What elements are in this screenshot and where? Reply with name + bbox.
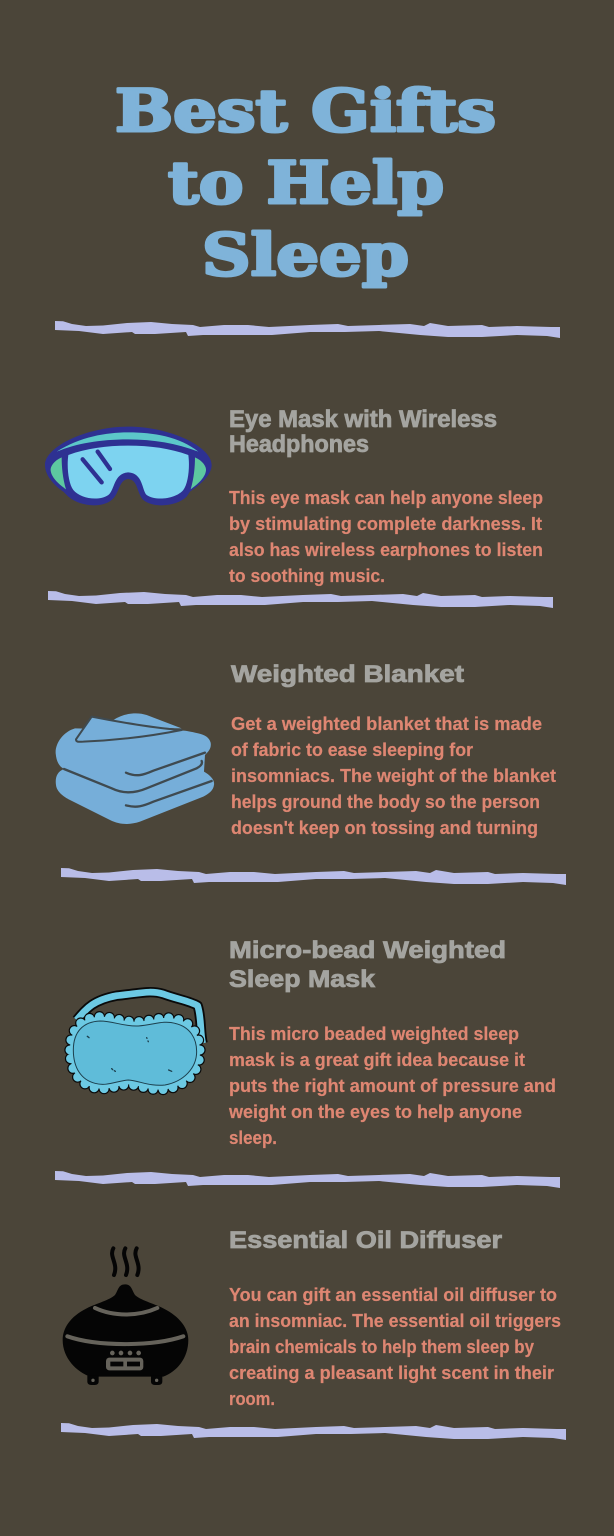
panel: weighted blanket bbox=[56, 661, 556, 838]
icon: folded blanket bbox=[56, 713, 214, 824]
text: micro-bead mask description: mask is a great gift idea because it bbox=[229, 1050, 525, 1070]
text: eye mask description bbox=[229, 488, 543, 586]
heading: micro-bead mask bbox=[229, 937, 506, 993]
title bbox=[115, 77, 496, 289]
text: diffuser description: brain chemicals to help them sleep by bbox=[229, 1337, 534, 1357]
text: diffuser description: creating a pleasant light scent in their bbox=[229, 1363, 554, 1383]
heading: eye mask bbox=[229, 406, 497, 458]
title: to Help bbox=[168, 149, 444, 217]
text: eye mask description: This eye mask can help anyone sleep bbox=[229, 488, 543, 508]
text: weighted blanket description: insomniacs. The weight of the blanket bbox=[231, 766, 556, 786]
text: micro-bead mask description: weight on the eyes to help anyone bbox=[228, 1102, 522, 1122]
text: diffuser description bbox=[229, 1285, 561, 1409]
heading: essential oil diffuser: Essential Oil Diffuser bbox=[229, 1227, 502, 1254]
heading: micro-bead mask: Micro-bead Weighted bbox=[229, 937, 506, 964]
panel: eye mask with wireless headphones bbox=[45, 406, 543, 586]
text: micro-bead mask description: This micro beaded weighted sleep bbox=[229, 1024, 519, 1044]
text: micro-bead mask description bbox=[228, 1024, 556, 1148]
text: diffuser description: an insomniac. The essential oil triggers bbox=[229, 1311, 561, 1331]
heading: weighted blanket: Weighted Blanket bbox=[231, 661, 464, 688]
text: micro-bead mask description: puts the right amount of pressure and bbox=[229, 1076, 556, 1096]
text: diffuser description: room. bbox=[229, 1389, 275, 1409]
title: Best Gifts bbox=[115, 77, 496, 145]
heading: micro-bead mask: Sleep Mask bbox=[229, 966, 376, 993]
text: weighted blanket description: of fabric to ease sleeping for bbox=[231, 740, 473, 760]
text: diffuser description: You can gift an essential oil diffuser to bbox=[229, 1285, 557, 1305]
text: micro-bead mask description: sleep. bbox=[229, 1128, 277, 1148]
text: eye mask description: by stimulating complete darkness. It bbox=[229, 514, 542, 534]
panel: micro-bead weighted sleep mask bbox=[70, 937, 556, 1148]
text: weighted blanket description: doesn't keep on tossing and turning bbox=[231, 818, 538, 838]
text: weighted blanket description bbox=[231, 714, 556, 838]
text: weighted blanket description: Get a weighted blanket that is made bbox=[231, 714, 542, 734]
icon: sleep mask bbox=[70, 992, 203, 1090]
title: Sleep bbox=[202, 221, 409, 289]
panel: essential oil diffuser bbox=[63, 1227, 561, 1409]
icon: goggles eye mask bbox=[45, 427, 212, 505]
text: eye mask description: to soothing music. bbox=[229, 566, 385, 586]
heading: eye mask: Headphones bbox=[229, 431, 369, 458]
icon: oil diffuser bbox=[63, 1248, 188, 1385]
text: eye mask description: also has wireless earphones to listen bbox=[229, 540, 543, 560]
heading: eye mask: Eye Mask with Wireless bbox=[229, 406, 497, 433]
text: weighted blanket description: helps ground the body so the person bbox=[231, 792, 540, 812]
